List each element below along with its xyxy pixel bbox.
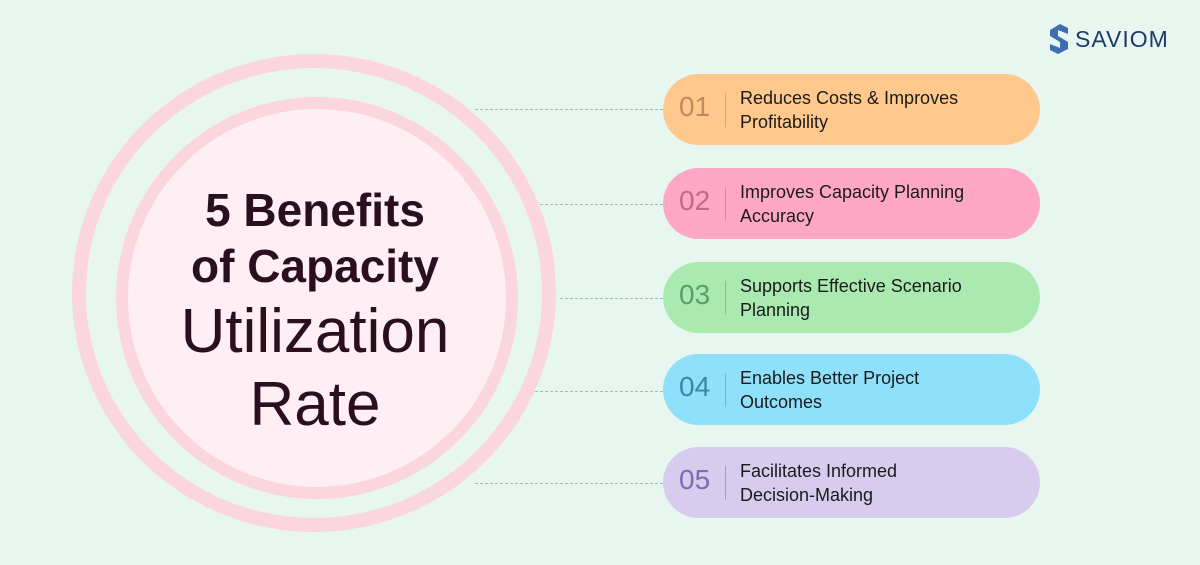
benefit 03: Supports Effective Scenario bbox=[740, 276, 962, 296]
benefit 03: Planning bbox=[740, 300, 810, 320]
benefit 02: Improves Capacity Planning bbox=[740, 182, 964, 202]
benefit 04: Outcomes bbox=[740, 392, 822, 412]
benefit 04 bbox=[663, 354, 1040, 425]
circle graphic bbox=[72, 54, 556, 532]
benefit 01: 01 bbox=[679, 91, 710, 122]
benefit 03 bbox=[663, 262, 1040, 333]
dashed connectors bbox=[475, 109, 663, 484]
benefit 04: Enables Better Project bbox=[740, 368, 919, 388]
benefit 01 bbox=[663, 74, 1040, 145]
title bbox=[181, 184, 449, 439]
benefit 01: Reduces Costs & Improves bbox=[740, 88, 958, 108]
benefit 05: Decision-Making bbox=[740, 485, 873, 505]
logo: SAVIOM bbox=[1075, 26, 1169, 52]
title: 5 Benefits bbox=[205, 184, 425, 236]
benefit 02: Accuracy bbox=[740, 206, 814, 226]
logo bbox=[1050, 24, 1169, 54]
title: of Capacity bbox=[191, 240, 439, 292]
benefit 02: 02 bbox=[679, 185, 710, 216]
benefit 03: 03 bbox=[679, 279, 710, 310]
benefit 05: 05 bbox=[679, 464, 710, 495]
benefit 02 bbox=[663, 168, 1040, 239]
benefit 05 bbox=[663, 447, 1040, 518]
benefit 01: Profitability bbox=[740, 112, 828, 132]
benefit 04: 04 bbox=[679, 371, 710, 402]
title: Utilization bbox=[181, 297, 449, 366]
benefit 05: Facilitates Informed bbox=[740, 461, 897, 481]
title: Rate bbox=[250, 370, 380, 439]
